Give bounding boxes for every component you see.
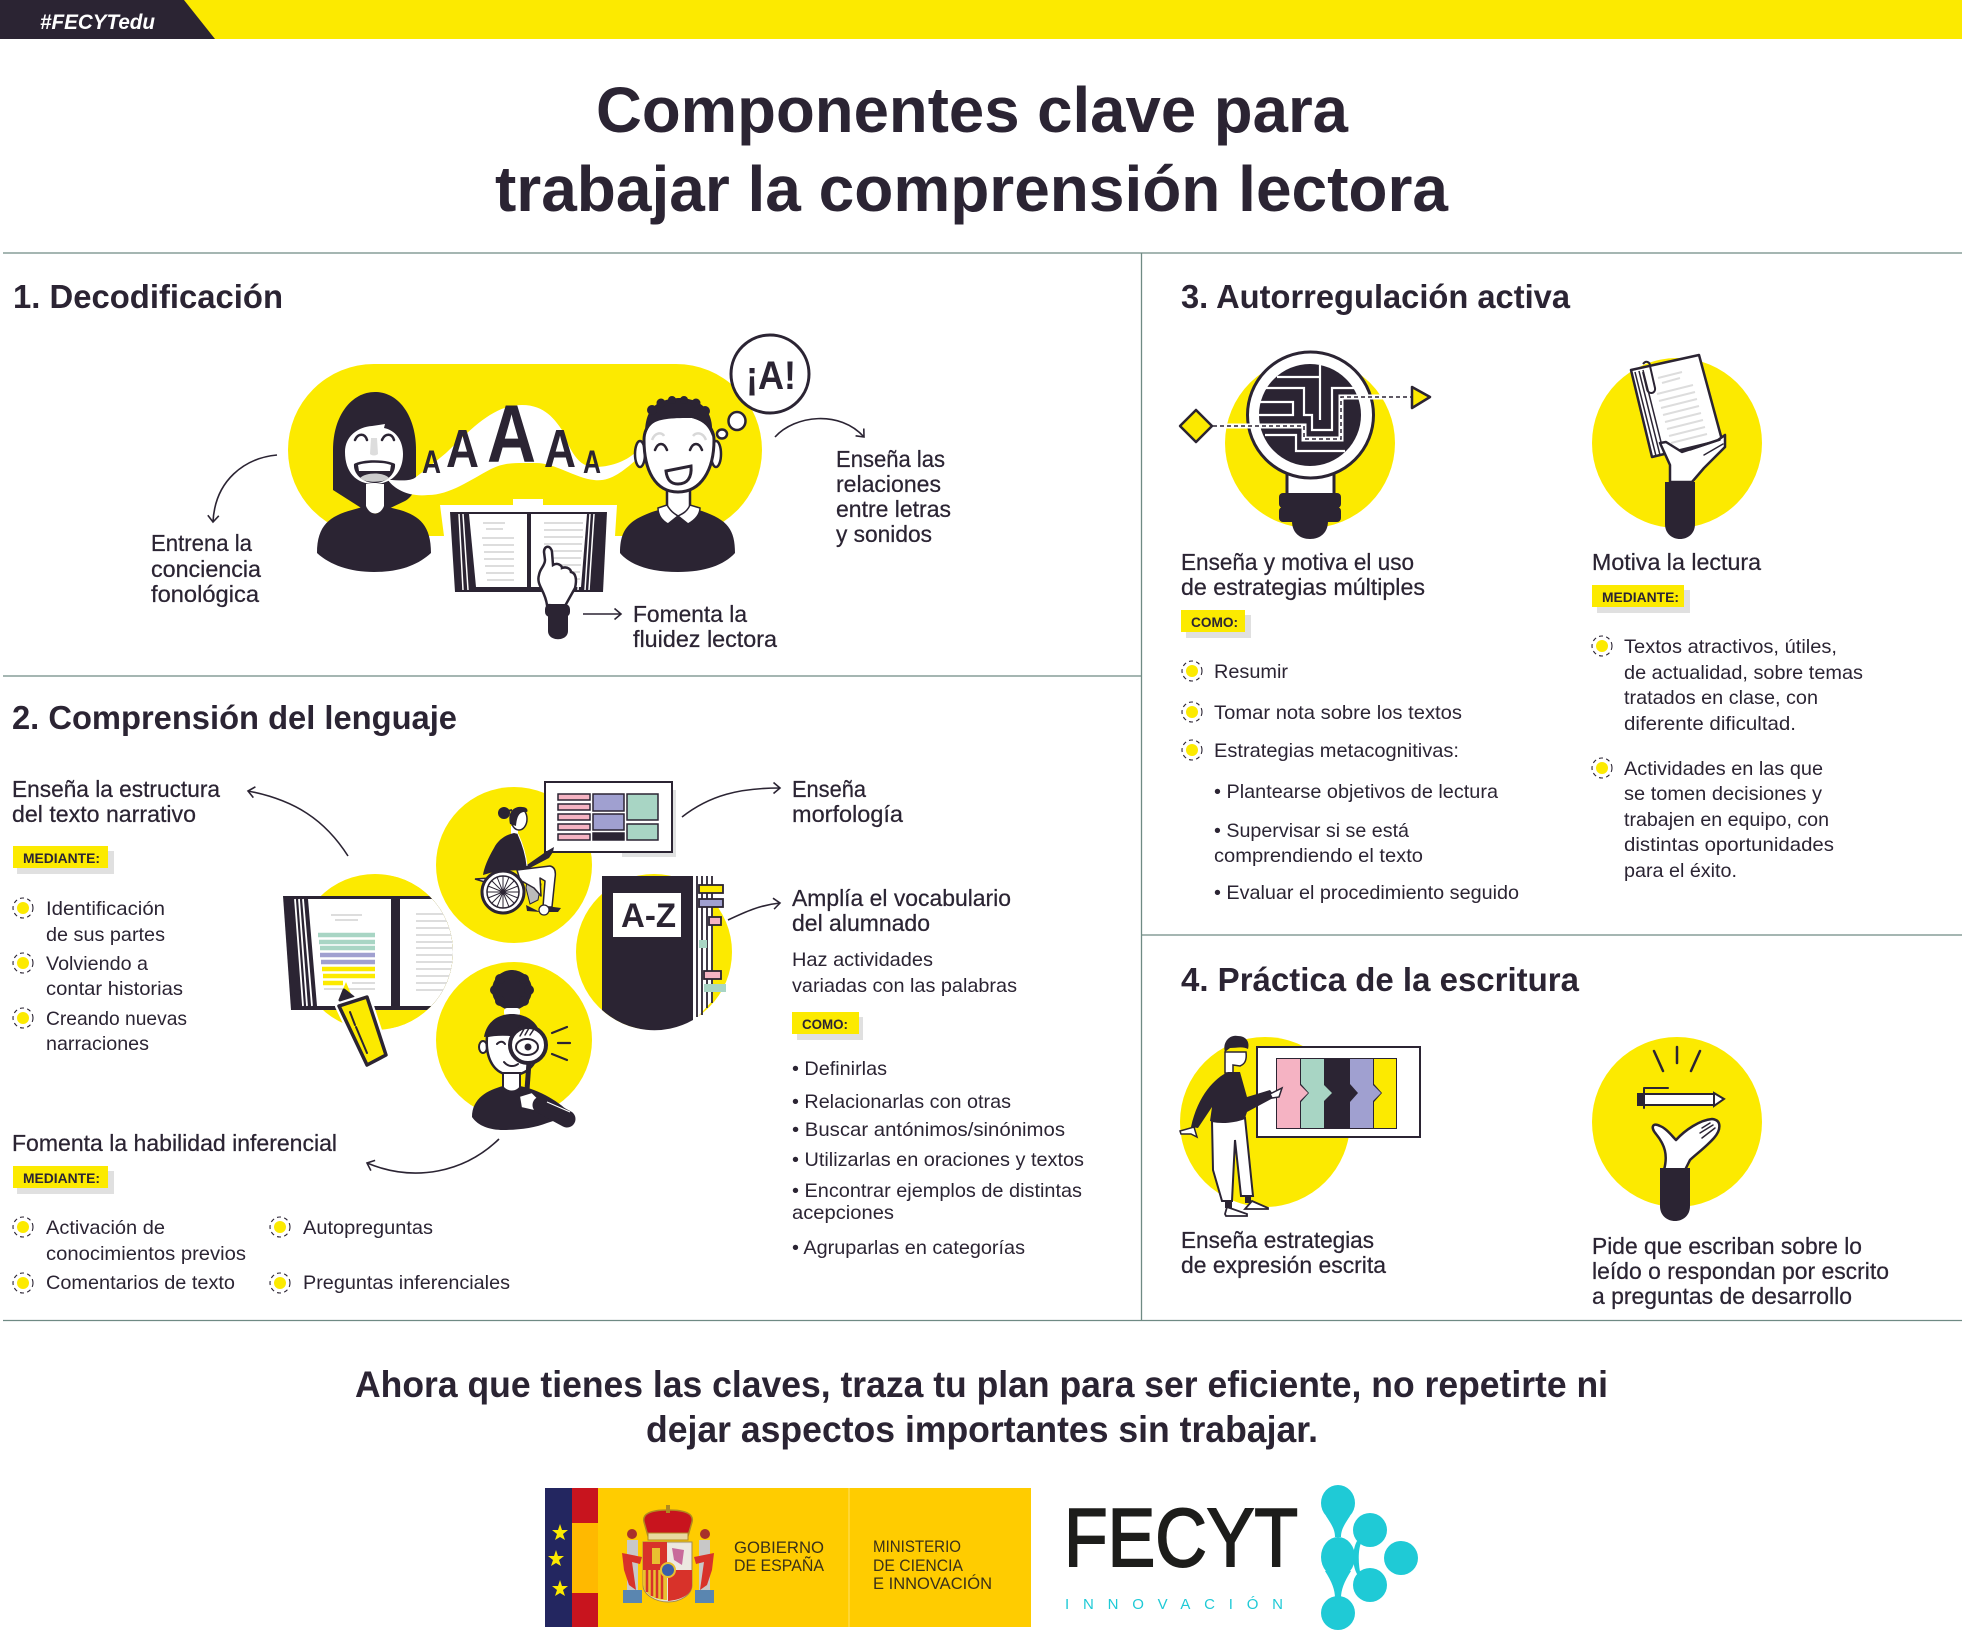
badge: mediante [1592,585,1690,613]
title: Componentes clave para [596,74,1348,146]
text: vocabulary: del alumnado [792,910,930,936]
text: Gobierno de España [734,1538,825,1575]
text [1592,1233,1889,1309]
bullet list: tratados en clase, con [1624,687,1818,709]
highlighter [339,982,386,1065]
text: Enseña estrategias [1181,1227,1374,1253]
text [1181,1227,1387,1278]
badge: mediante: MEDIANTE: [23,850,100,866]
bullet list: Estrategias metacognitivas: [1214,740,1459,762]
text: inference: Fomenta la habilidad inferencial [12,1130,337,1156]
label: Entrena la [151,530,253,556]
bullet list [1592,636,1863,882]
bullet list: conocimientos previos [46,1243,246,1265]
text: narrative structure: Enseña la estructura [12,776,221,802]
label: Enseña las [836,446,945,472]
text: vocabulary: Haz actividades [792,949,933,971]
label: morfología [792,801,904,827]
letters A: A [446,419,479,479]
bullet list: comprendiendo el texto [1214,845,1423,867]
label: entre letras [836,496,951,522]
bullet list: distintas oportunidades [1624,834,1834,856]
icon: coat of arms [622,1505,714,1603]
badge: como [1181,610,1251,638]
list: • Utilizarlas en oraciones y textos [792,1149,1084,1171]
arrow [682,788,780,817]
panel: 3. Autorregulación activa [1180,278,1863,904]
badge: como [792,1012,863,1040]
bullet list: Activación de [46,1217,165,1239]
label [792,776,904,827]
heading: 4. Práctica de la escritura [1181,961,1580,998]
text: narrative structure: del texto narrativo [12,801,196,827]
arrow [775,419,864,437]
arrow [367,1139,499,1173]
text: a preguntas de desarrollo [1592,1283,1852,1309]
bullet list: Autopreguntas [303,1217,433,1239]
title [495,74,1448,225]
text [1181,549,1425,600]
bullet list: para el éxito. [1624,860,1737,882]
arrow [583,613,621,615]
hashtag: #FECYTedu [40,11,155,34]
bullet list [13,898,187,1055]
logo: FECYT: FECYT [1064,1491,1298,1584]
letters A: A [583,444,601,480]
badge: mediante [13,846,114,874]
bullet list: contar historias [46,978,183,1000]
letters A: A [544,419,576,479]
panel: 4. Práctica de la escritura [1180,961,1889,1309]
title: trabajar la comprensión lectora [495,153,1448,225]
arrow [248,791,348,856]
illustration: teacher at board [1180,1036,1420,1216]
heading: 2. Comprensión del lenguaje [12,699,457,736]
heading: 1. Decodificación [13,278,283,315]
illustration: highlighted book [283,874,453,1067]
bullet list [1182,661,1519,904]
bullet list: Volviendo a [46,953,148,975]
label: conciencia [151,556,262,582]
illustration: bulb maze [1180,352,1430,539]
bullet list: trabajen en equipo, con [1624,809,1829,831]
text: vocabulary: Amplía el vocabulario [792,885,1011,911]
panel: 2. Comprensión del lenguaje [12,699,1084,1294]
text: de estrategias múltiples [1181,574,1425,600]
label: relaciones [836,471,941,497]
bullet list: de actualidad, sobre temas [1624,662,1863,684]
bullet list: se tomen decisiones y [1624,783,1822,805]
arrow [728,903,780,920]
closing message [355,1364,1608,1450]
text: Enseña y motiva el uso [1181,549,1414,575]
label: Fomenta la [633,601,748,627]
text: vocabulary [792,885,1017,997]
list: • Relacionarlas con otras [792,1091,1011,1113]
arrow [213,455,277,522]
woman [317,392,431,572]
bullet list [13,1217,510,1294]
bullet list: • Evaluar el procedimiento seguido [1214,882,1519,904]
bullet list: diferente dificultad. [1624,713,1796,735]
list: acepciones [792,1202,894,1224]
label: y sonidos [836,521,932,547]
list: • Definirlas [792,1058,887,1080]
icon: molecule [1321,1485,1418,1630]
text: Ministerio: DE CIENCIA [873,1556,964,1575]
thought bubble: ¡A! [746,354,796,398]
bullet list: Preguntas inferenciales [303,1272,510,1294]
bullet list: narraciones [46,1033,149,1055]
badge: como: COMO: [802,1016,848,1032]
text: Ministerio [873,1537,992,1593]
bullet list: • Supervisar si se está [1214,820,1409,842]
text: Gobierno de España: GOBIERNO [734,1538,824,1557]
text: narrative structure [12,776,221,827]
list: • Buscar antónimos/sinónimos [792,1119,1065,1141]
list [792,1058,1084,1259]
label [836,446,951,547]
illustration: A-Z dictionary [576,874,732,1030]
list: • Agruparlas en categorías [792,1237,1025,1259]
badge: mediante: MEDIANTE: [23,1170,100,1186]
badge: como: COMO: [1191,614,1238,630]
badge: mediante [13,1166,114,1194]
letters A [422,389,601,480]
bullet list: • Plantearse objetivos de lectura [1214,781,1498,803]
closing message: dejar aspectos importantes sin trabajar. [646,1409,1318,1450]
bullet list: Textos atractivos, útiles, [1624,636,1837,658]
bullet list: Identificación [46,898,165,920]
bullet list: de sus partes [46,924,165,946]
label: fonológica [151,581,260,607]
icon: stars [548,1524,568,1596]
sound wave [388,405,636,495]
bullet list: Actividades en las que [1624,758,1823,780]
illustration: student in wheelchair with board [436,782,676,943]
bullet list: Comentarios de texto [46,1272,235,1294]
illustration: A-Z dictionary: A-Z [621,897,676,935]
logo: FECYT [1064,1485,1418,1630]
badge: mediante: MEDIANTE: [1602,589,1679,605]
label: Enseña [792,776,867,802]
bullet list: Creando nuevas [46,1008,187,1030]
panel: 1. Decodificación [13,278,951,652]
illustration: hand and pen [1592,1037,1762,1221]
letters A: A [487,389,536,480]
top banner [0,0,1962,39]
open book with hand [440,499,617,639]
bullet list: Tomar nota sobre los textos [1214,702,1462,724]
logo: FECYT: INNOVACIÓN [1065,1596,1283,1613]
illustration: hand with papers [1592,355,1762,539]
man [620,396,735,572]
text: Motiva la lectura [1592,549,1762,575]
illustration: detective with magnifier [436,962,592,1130]
logo: Gobierno de España [545,1488,1031,1627]
text: leído o respondan por escrito [1592,1258,1889,1284]
text: Ministerio: E INNOVACIÓN [873,1574,992,1593]
text: Gobierno de España: DE ESPAÑA [734,1556,825,1575]
heading: 3. Autorregulación activa [1181,278,1571,315]
label: fluidez lectora [633,626,778,652]
closing message: Ahora que tienes las claves, traza tu plan para ser eficiente, no repetirte ni [355,1364,1608,1405]
letters A: A [422,444,441,480]
text: de expresión escrita [1181,1252,1387,1278]
thought bubble [717,335,809,438]
text: Pide que escriban sobre lo [1592,1233,1862,1259]
illustration: readers and sound wave [288,335,809,639]
text: Ministerio: MINISTERIO [873,1537,961,1556]
text: vocabulary: variadas con las palabras [792,975,1017,997]
list: • Encontrar ejemplos de distintas [792,1180,1082,1202]
label [633,601,778,652]
bullet list: Resumir [1214,661,1289,683]
